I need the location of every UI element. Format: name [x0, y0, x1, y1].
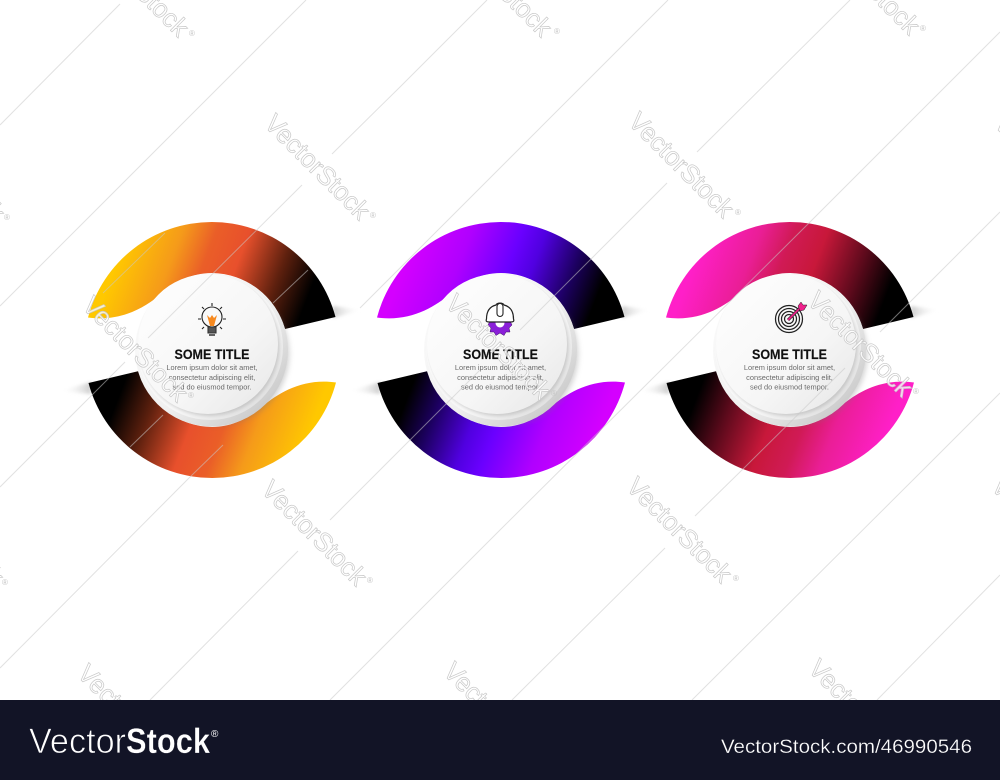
description: Lorem ipsum dolor sit amet,	[166, 363, 258, 372]
watermark text: ®	[920, 24, 926, 33]
description: consectetur adipiscing elit,	[457, 373, 544, 382]
description: sed do eiusmod tempor.	[750, 382, 829, 392]
strip shadow right	[333, 306, 362, 318]
middle disc	[715, 274, 861, 420]
top pink arc	[666, 222, 914, 329]
watermark text: ®	[188, 391, 194, 400]
description: consectetur adipiscing elit,	[746, 373, 833, 382]
watermark text: VectorStock	[438, 656, 556, 774]
bottom pink arc	[666, 371, 914, 478]
outer disc	[713, 274, 866, 426]
disc shadow	[436, 283, 578, 425]
footer bar	[0, 700, 1000, 780]
step 1: orange ring	[60, 222, 362, 478]
watermark text: VectorStock	[440, 288, 558, 406]
watermark text: VectorStock	[256, 474, 374, 592]
watermark text: VectorStock	[621, 471, 739, 589]
watermark text: ®	[913, 387, 919, 396]
footer logo: Stock	[126, 722, 210, 761]
watermark text: ®	[554, 27, 560, 36]
middle disc	[426, 274, 572, 420]
top orange arc	[88, 222, 336, 329]
top disc	[138, 274, 278, 414]
watermark text: VectorStock	[803, 653, 921, 771]
top disc shadow	[140, 276, 280, 416]
watermark text: ®	[367, 576, 373, 585]
step 2: purple ring	[349, 222, 651, 478]
icon: target and dart	[776, 302, 807, 332]
icon: helmet and gear	[486, 303, 514, 336]
watermark text: VectorStock	[623, 106, 741, 224]
top disc shadow	[718, 276, 858, 416]
footer logo	[29, 722, 219, 761]
watermark text: VectorStock	[72, 658, 190, 776]
title: SOME TITLE	[752, 346, 827, 362]
icon: light bulb	[198, 303, 226, 335]
watermark text: ®	[189, 29, 195, 38]
title: SOME TITLE	[174, 346, 250, 362]
description: Lorem ipsum dolor sit amet,	[455, 363, 546, 372]
watermark text: ®	[551, 389, 557, 398]
disc shadow	[725, 283, 867, 425]
strip shadow left	[60, 382, 91, 394]
outer disc	[135, 274, 288, 426]
footer image id: VectorStock.com/46990546	[721, 737, 972, 758]
bottom orange arc	[88, 371, 336, 478]
strip shadow left	[349, 382, 380, 394]
bottom purple arc	[378, 371, 625, 478]
strip shadow right	[911, 306, 940, 318]
watermark text: VectorStock	[802, 285, 920, 403]
footer logo: Vector	[29, 722, 126, 761]
outer disc	[424, 274, 577, 426]
watermark text: VectorStock	[77, 290, 195, 408]
step 3: pink ring	[638, 222, 940, 478]
watermark text: ®	[4, 213, 10, 222]
top disc shadow	[428, 276, 568, 416]
watermark text: ®	[2, 578, 8, 587]
title: SOME TITLE	[463, 346, 538, 362]
watermark text: VectorStock	[259, 108, 377, 226]
description: Lorem ipsum dolor sit amet,	[744, 363, 835, 372]
description: sed do eiusmod tempor.	[461, 382, 540, 392]
top disc	[716, 274, 856, 414]
watermark text: ®	[370, 211, 376, 220]
top purple arc	[377, 222, 624, 329]
top disc	[427, 274, 567, 414]
strip shadow left	[638, 382, 669, 394]
description: sed do eiusmod tempor.	[173, 382, 251, 392]
watermark text: ®	[733, 574, 739, 583]
disc shadow	[147, 283, 289, 425]
strip shadow right	[622, 306, 651, 318]
description: consectetur adipiscing elit,	[169, 373, 255, 382]
watermark text: ®	[735, 208, 741, 217]
footer logo: ®	[211, 729, 219, 740]
middle disc	[137, 274, 283, 420]
